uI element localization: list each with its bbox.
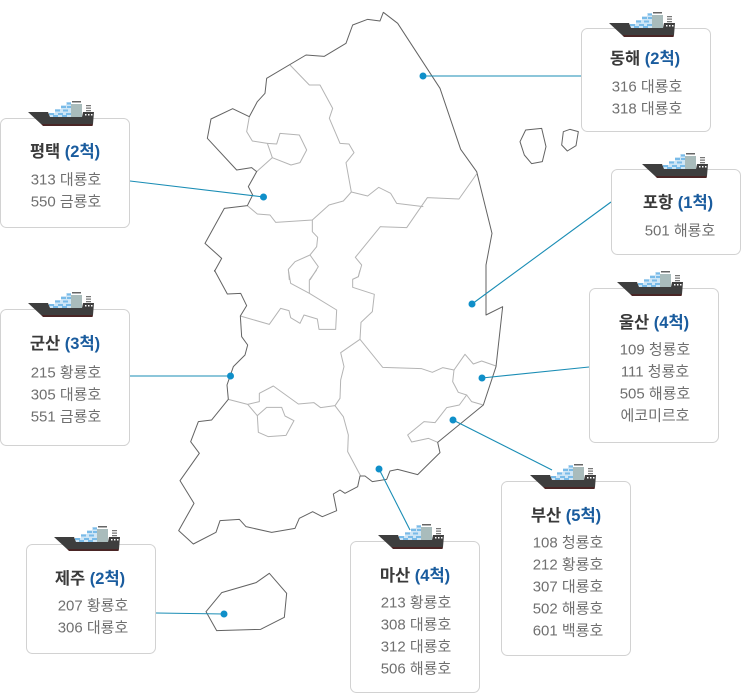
icon: ship bbox=[28, 292, 94, 317]
text: Gunsan ships: 305 대룡호 bbox=[31, 386, 101, 404]
icon: ship bbox=[530, 464, 596, 489]
panel: Pyeongtaek bbox=[0, 101, 130, 228]
panel: Gunsan bbox=[0, 292, 130, 446]
text: Busan ships: 502 해룡호 bbox=[533, 600, 603, 618]
text: Masan ships: 308 대룡호 bbox=[381, 616, 451, 634]
text: Jeju ships: 306 대룡호 bbox=[58, 620, 128, 636]
heading: Gunsan: 군산 (3척) bbox=[30, 334, 100, 353]
panel: Jeju bbox=[26, 526, 156, 654]
text: Masan ships: 312 대룡호 bbox=[381, 638, 451, 656]
connector: Masan bbox=[376, 466, 410, 530]
connector: Jeju bbox=[156, 610, 228, 618]
text: Busan ships: 601 백룡호 bbox=[533, 622, 603, 640]
text: Ulsan ships: 에코미르호 bbox=[620, 408, 690, 424]
panel: Ulsan bbox=[590, 271, 718, 442]
islands: Ulleungdo and Dokdo bbox=[520, 128, 578, 164]
heading: Pohang: 포항 (1척) bbox=[643, 193, 713, 212]
map: northern half outline and borders bbox=[205, 12, 492, 280]
panel: Busan bbox=[502, 464, 630, 656]
connector: Gunsan bbox=[130, 372, 234, 380]
icon: ship bbox=[642, 153, 708, 178]
connector: Pyeongtaek bbox=[130, 181, 267, 200]
connector: Ulsan bbox=[478, 367, 589, 382]
panel: Donghae bbox=[582, 12, 710, 132]
text: Gunsan ships: 551 금룡호 bbox=[31, 408, 101, 426]
text: Donghae ships: 316 대룡호 bbox=[612, 78, 682, 96]
text: Masan ships: 506 해룡호 bbox=[381, 660, 451, 678]
icon: ship bbox=[617, 271, 683, 296]
connector: Pohang bbox=[468, 202, 611, 308]
text: Donghae ships: 318 대룡호 bbox=[612, 100, 682, 118]
heading: Masan: 마산 (4척) bbox=[380, 566, 450, 585]
text: Jeju ships: 207 황룡호 bbox=[58, 598, 128, 614]
text: Pyeongtaek ships: 550 금룡호 bbox=[31, 194, 101, 210]
text: Pyeongtaek ships: 313 대룡호 bbox=[31, 172, 101, 188]
icon: ship bbox=[54, 526, 120, 551]
icon: ship bbox=[609, 12, 675, 37]
map: South Korea regions bbox=[179, 12, 503, 544]
text: Busan ships: 212 황룡호 bbox=[533, 556, 603, 574]
map: southern half outline and borders bbox=[179, 270, 503, 544]
icon: ship bbox=[378, 524, 444, 549]
text: Busan ships: 108 청룡호 bbox=[533, 534, 603, 552]
icon: ship bbox=[28, 101, 94, 126]
text: Masan ships: 213 황룡호 bbox=[381, 594, 451, 612]
island: Jeju bbox=[206, 573, 287, 631]
text: Ulsan ships: 505 해룡호 bbox=[620, 386, 690, 402]
heading: Donghae: 동해 (2척) bbox=[610, 49, 680, 68]
heading: Pyeongtaek: 평택 (2척) bbox=[30, 142, 100, 161]
text: Pohang ships: 501 해룡호 bbox=[645, 222, 715, 240]
panel: Masan bbox=[350, 524, 480, 692]
text: Ulsan ships: 109 청룡호 bbox=[620, 342, 690, 358]
text: Busan ships: 307 대룡호 bbox=[533, 578, 603, 596]
connector: Donghae bbox=[420, 72, 581, 80]
connector: Busan bbox=[450, 416, 552, 470]
panel: Pohang bbox=[612, 153, 740, 254]
heading: Ulsan: 울산 (4척) bbox=[619, 313, 689, 332]
text: Gunsan ships: 215 황룡호 bbox=[31, 364, 101, 382]
text: Ulsan ships: 111 청룡호 bbox=[621, 364, 689, 380]
heading: Jeju: 제주 (2척) bbox=[55, 569, 125, 588]
heading: Busan: 부산 (5척) bbox=[531, 506, 601, 525]
